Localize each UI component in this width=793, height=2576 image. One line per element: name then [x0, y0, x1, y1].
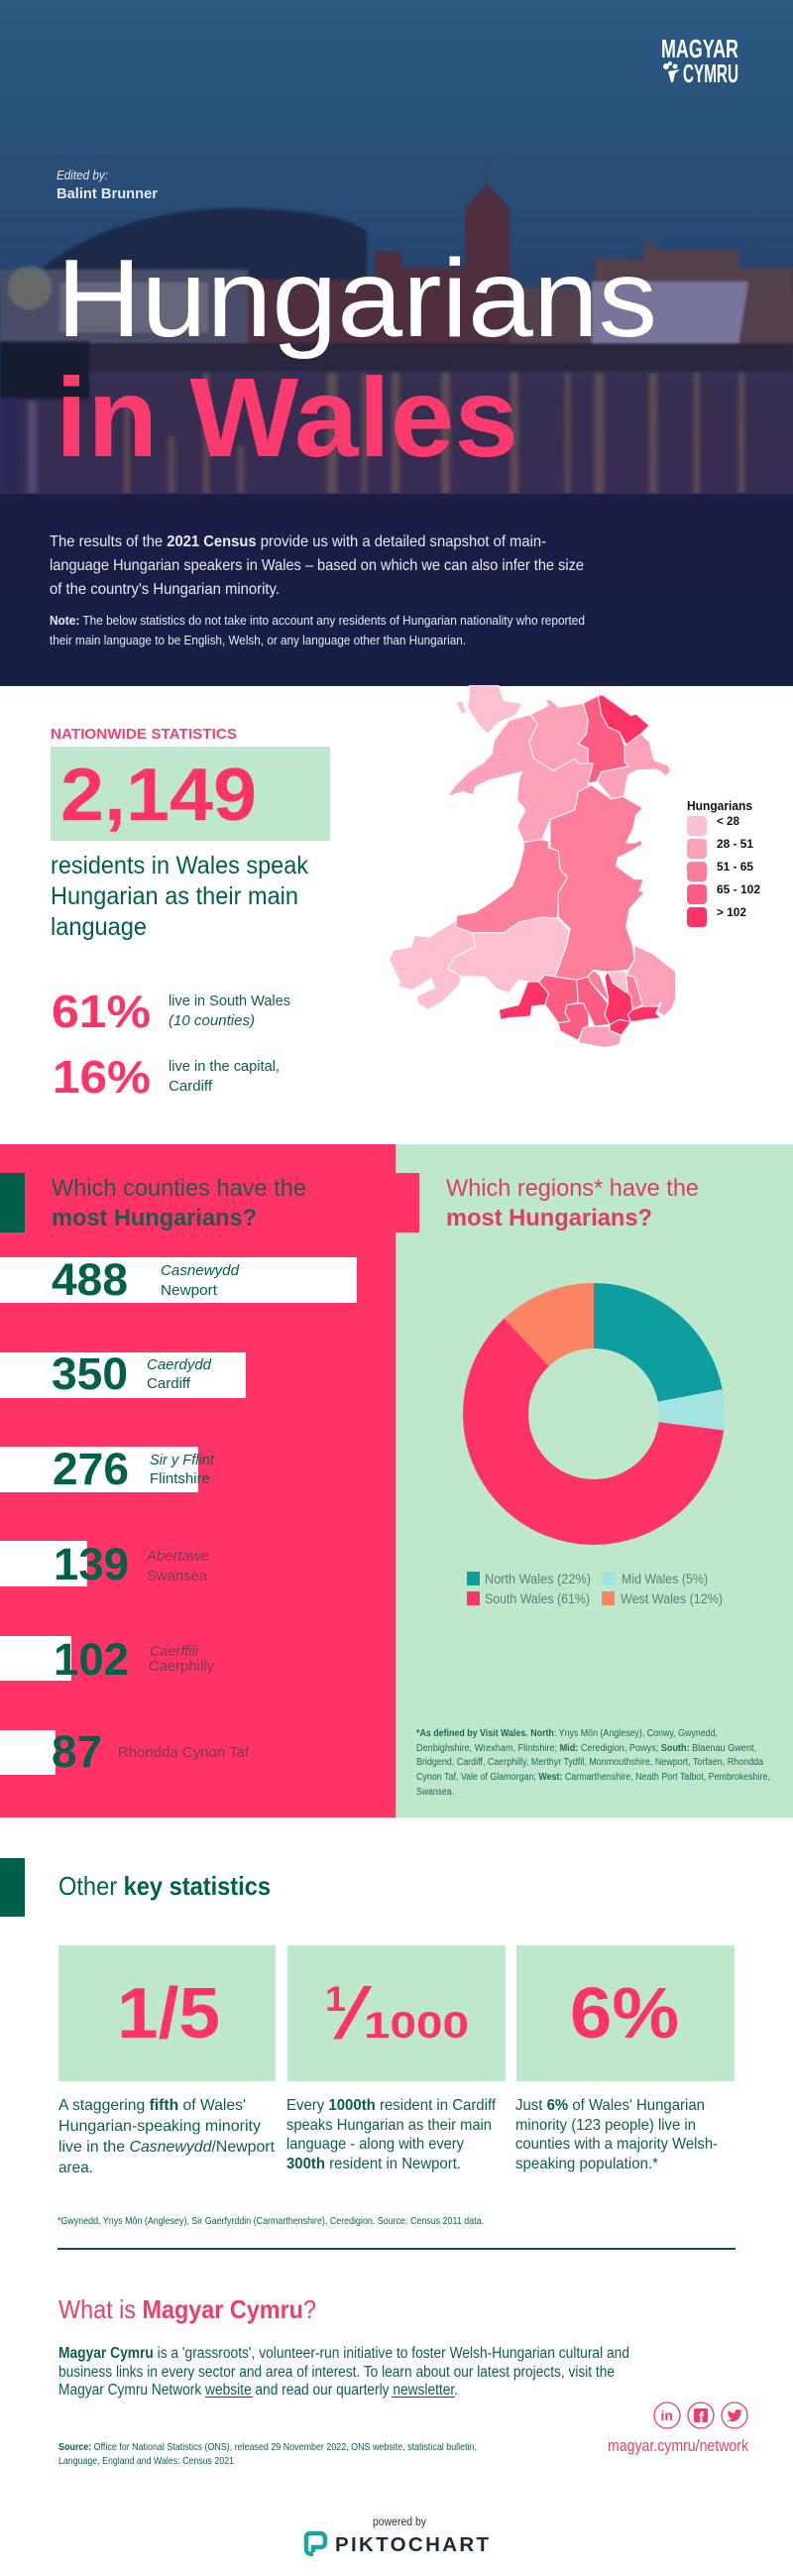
- donut chart: [463, 1283, 725, 1545]
- bar: Swansea 139: [0, 1539, 209, 1589]
- stat card: 1/1000: /: [327, 1972, 378, 2052]
- key statistics footnote: *Gwynedd, Ynys Môn (Anglesey), Sir Gaerfyrddin (Carmarthenshire), Ceredigion. Source: Census 2011 data.: [57, 2215, 484, 2227]
- map legend: 65 - 102: [717, 882, 760, 896]
- residents text: [51, 852, 308, 941]
- title: [56, 237, 657, 480]
- note: Note: The below statistics do not take into account any residents of Hungarian nationality who reported: [50, 614, 585, 628]
- logo: Magyar Cymru: CYMRU: [683, 59, 738, 88]
- counties heading: Which counties have the: [52, 1175, 306, 1202]
- regions heading: most Hungarians?: [446, 1205, 652, 1231]
- regions heading: Which regions* have the: [446, 1175, 699, 1202]
- bar: Rhondda Cynon Taf 87: [0, 1726, 250, 1777]
- stat card: 1/1000: 1: [325, 1980, 346, 2019]
- map legend: 51 - 65: [717, 860, 753, 874]
- bar: Cardiff 350: Cardiff: [147, 1375, 191, 1392]
- icon: Piktochart mark: [306, 2533, 325, 2554]
- intro text: The results of the 2021 Census provide us with a detailed snapshot of main-: [50, 533, 546, 550]
- stat card: 6%: minority (123 people) live in: [515, 2117, 696, 2134]
- bar: Caerphilly 102: [0, 1634, 214, 1685]
- regions footnote: Bridgend, Cardiff, Caerphilly, Merthyr Tydfil, Monmouthshire, Newport, Torfaen, Rhondda: [416, 1757, 763, 1768]
- map legend: > 102: [717, 905, 746, 919]
- bar: Cardiff 350: 350: [52, 1348, 128, 1399]
- heading: NATIONWIDE STATISTICS: [51, 726, 237, 743]
- footer: powered by Piktochart: PIKTOCHART: [335, 2533, 489, 2556]
- regions footnote: Swansea.: [416, 1787, 454, 1798]
- description: Magyar Cymru is a 'grassroots', volunteer-run initiative to foster Welsh-Hungarian cultural and: [58, 2345, 629, 2362]
- map legend: < 28: [717, 814, 739, 828]
- donut legend: [467, 1572, 723, 1606]
- stat card: 1/5: [58, 1945, 276, 2176]
- heading: What is Magyar Cymru?: [58, 2294, 316, 2324]
- social icons: [654, 2402, 747, 2428]
- description: [58, 2345, 629, 2399]
- donut legend: Mid Wales (5%): [622, 1572, 708, 1586]
- description: business links in every sector and area of interest. To learn about our latest projects, visit the: [58, 2364, 615, 2381]
- bar: Caerphilly 102: Caerphilly: [149, 1658, 214, 1675]
- hero photo background: Cardiff Bay at dusk: [0, 0, 793, 686]
- bar: Flintshire 276: 276: [53, 1444, 129, 1494]
- text panel overlay on hero: [0, 494, 793, 685]
- counties heading: most Hungarians?: [52, 1205, 257, 1231]
- stat card: 6%: speaking population.*: [515, 2156, 658, 2172]
- bar: Flintshire 276: [0, 1444, 215, 1494]
- stat: 16%: live in the capital,: [169, 1059, 280, 1075]
- bar: Newport 488: [0, 1254, 357, 1305]
- stat card: 1/5: A staggering fifth of Wales': [58, 2097, 246, 2114]
- source: [58, 2441, 477, 2467]
- footer: powered by Piktochart: powered by: [373, 2517, 426, 2528]
- big number box: 2,149: [60, 753, 257, 836]
- stat: 61%: live in South Wales: [169, 994, 290, 1009]
- stat card: 6%: 6%: [570, 1974, 679, 2053]
- map of Wales by county: [390, 686, 676, 1048]
- bar: Swansea 139: 139: [54, 1539, 129, 1589]
- key statistics heading: Other key statistics: [58, 1871, 271, 1901]
- bar: Newport 488: 488: [52, 1254, 128, 1305]
- map legend: 28 - 51: [717, 837, 753, 851]
- stat card: 1/5: live in the Casnewydd/Newport: [58, 2139, 276, 2156]
- description: Magyar Cymru Network website and read our quarterly newsletter.: [58, 2382, 458, 2399]
- stat card: 1/1000: 300th resident in Newport.: [286, 2156, 461, 2172]
- bar: Rhondda Cynon Taf 87: Rhondda Cynon Taf: [118, 1744, 250, 1761]
- intro text: of the country's Hungarian minority.: [50, 581, 280, 598]
- donut legend: South Wales (61%): [485, 1591, 590, 1606]
- map legend: Hungarians: [687, 799, 752, 813]
- big number box: [51, 747, 330, 841]
- stat card: 1/1000: [286, 1945, 506, 2172]
- heading marker: [0, 1858, 25, 1917]
- panel: counties bar chart: [0, 1144, 396, 1817]
- residents text: residents in Wales speak: [51, 852, 308, 879]
- stat card: 1/1000: language - along with every: [286, 2136, 464, 2153]
- social icons: f: [699, 2409, 705, 2426]
- regions heading: [446, 1175, 699, 1231]
- stat card: 6%: counties with a majority Welsh-: [515, 2136, 718, 2153]
- note: [50, 614, 585, 647]
- bar: Caerphilly 102: 102: [54, 1634, 129, 1685]
- regions footnote: *As defined by Visit Wales. North: Ynys Môn (Anglesey), Conwy, Gwynedd,: [416, 1728, 718, 1739]
- stat: 61%: 61%: [52, 986, 151, 1037]
- stat: 61%: (10 counties): [169, 1013, 255, 1029]
- intro text: [50, 533, 584, 598]
- logo: Magyar Cymru: MAGYAR: [661, 34, 738, 63]
- editor credit: [57, 169, 158, 202]
- stat card: 1/5: area.: [58, 2160, 93, 2176]
- stat card: 1/5: 1/5: [117, 1974, 220, 2053]
- panel: other key statistics: [0, 1858, 735, 2227]
- panel: regions donut: [396, 1144, 793, 1817]
- regions footnote: Denbighshire, Wrexham, Flintshire; Mid: Ceredigion, Powys; South: Blaenau Gwent,: [416, 1743, 756, 1754]
- bar: Flintshire 276: Sir y Fflint: [150, 1452, 215, 1468]
- donut legend: West Wales (12%): [621, 1591, 723, 1606]
- bar: Flintshire 276: Flintshire: [150, 1470, 210, 1487]
- source: Source: Office for National Statistics (ONS), released 29 November 2022, ONS website, statistical bulletin,: [58, 2441, 477, 2453]
- bar: Cardiff 350: Caerdydd: [147, 1356, 212, 1373]
- website link: magyar.cymru/network: [608, 2437, 749, 2455]
- stat card: 6%: Just 6% of Wales' Hungarian: [515, 2097, 705, 2114]
- note: their main language to be English, Welsh, or any language other than Hungarian.: [50, 634, 466, 647]
- bar: Caerphilly 102: Caerffili: [150, 1643, 199, 1660]
- stat card: 1/1000: 1000: [364, 2005, 469, 2046]
- map legend: [687, 799, 760, 927]
- bar: Newport 488: Newport: [161, 1282, 218, 1299]
- heading marker: [0, 1173, 25, 1232]
- bar: Swansea 139: Swansea: [147, 1568, 208, 1584]
- regions footnote: [416, 1728, 770, 1798]
- counties heading: [52, 1175, 306, 1231]
- residents text: Hungarian as their main: [51, 882, 298, 910]
- editor credit: Edited by:: [57, 169, 108, 182]
- title: Hungarians: [57, 237, 657, 360]
- logo: Magyar Cymru: [661, 34, 738, 88]
- stat card: 1/1000: speaks Hungarian as their main: [286, 2117, 492, 2134]
- residents text: language: [51, 913, 147, 941]
- bar: Cardiff 350: [0, 1348, 246, 1399]
- stat card: 1/1000: Every 1000th resident in Cardiff: [286, 2097, 497, 2114]
- panel: what is Magyar Cymru: [58, 2294, 749, 2467]
- bar: Swansea 139: Abertawe: [146, 1548, 209, 1565]
- stat: 16%: [53, 1051, 280, 1103]
- stat: 16%: Cardiff: [169, 1079, 213, 1095]
- stat: 16%: 16%: [53, 1051, 151, 1103]
- heading marker: [396, 1173, 419, 1232]
- regions footnote: Cynon Taf, Vale of Glamorgan; West: Carmarthenshire, Neath Port Talbot, Pembrokeshire,: [416, 1772, 770, 1783]
- stat: 61%: [52, 986, 290, 1037]
- source: Language, England and Wales: Census 2021: [58, 2455, 234, 2467]
- bar: Newport 488: Casnewydd: [161, 1262, 240, 1279]
- footer: powered by Piktochart: [306, 2517, 489, 2556]
- social icons: in: [660, 2407, 673, 2423]
- stat card: 6%: [515, 1945, 735, 2172]
- bar: Rhondda Cynon Taf 87: 87: [52, 1726, 102, 1777]
- panel: nationwide statistics: [51, 726, 330, 1103]
- editor credit: Balint Brunner: [57, 185, 158, 202]
- stat card: 1/5: Hungarian-speaking minority: [58, 2118, 261, 2135]
- intro text: language Hungarian speakers in Wales – based on which we can also infer the size: [50, 557, 584, 574]
- title: in Wales: [56, 355, 518, 480]
- donut legend: North Wales (22%): [485, 1572, 591, 1586]
